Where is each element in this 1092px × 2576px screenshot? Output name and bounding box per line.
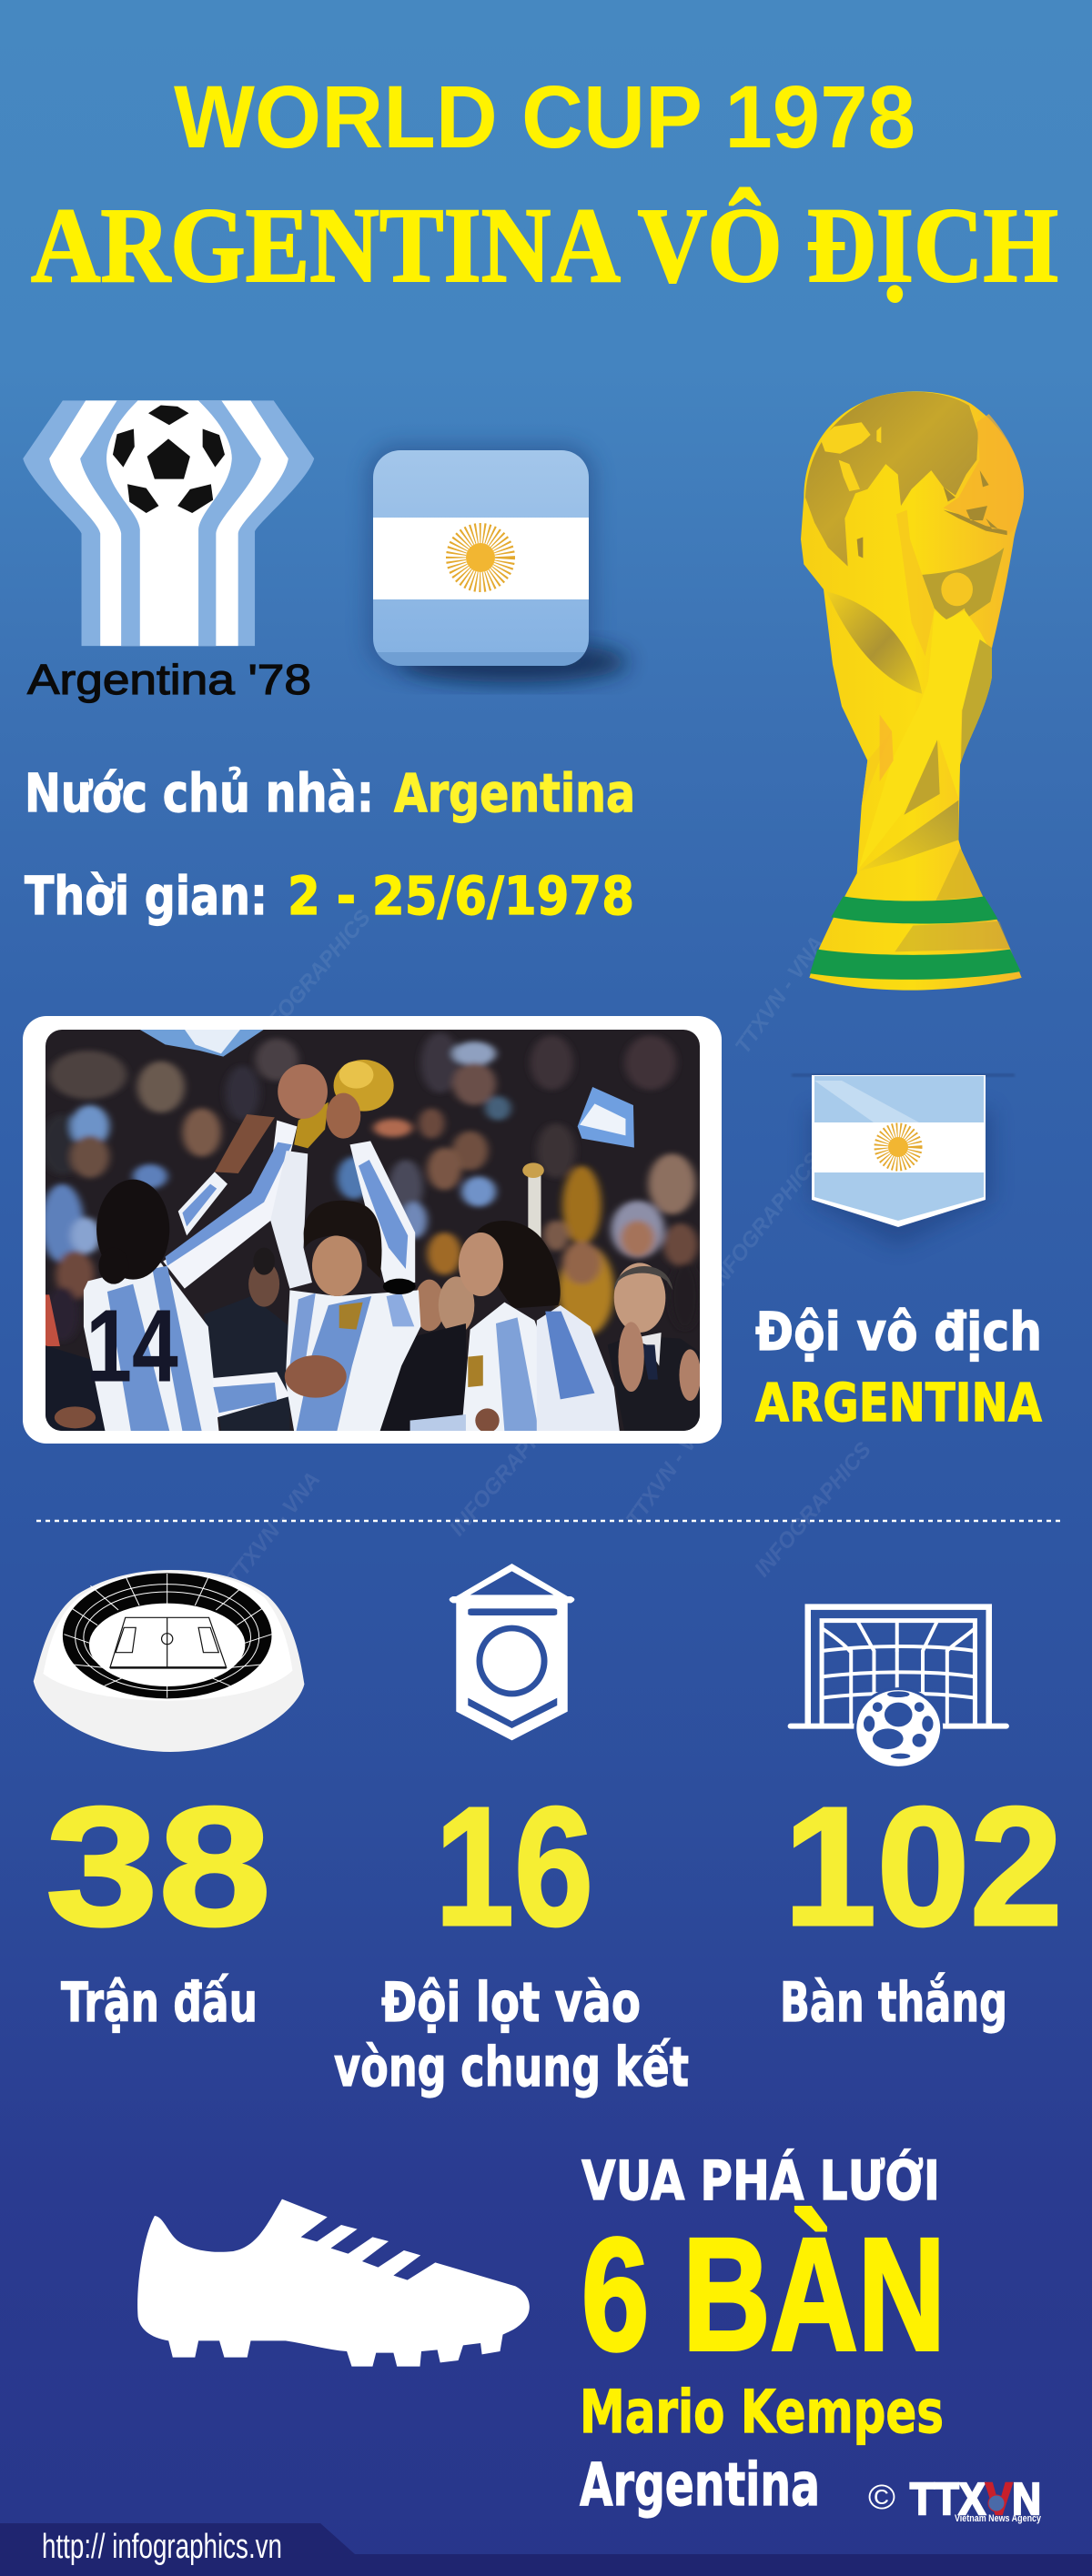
- title: [31, 67, 1058, 305]
- champion label: Đội vô địch: [755, 1301, 1042, 1363]
- copyright and agency logo: TTXVN: [910, 2475, 1041, 2524]
- copyright and agency logo: Vietnam News Agency: [955, 2513, 1042, 2524]
- scorer country: Argentina: [580, 2451, 820, 2520]
- copyright and agency logo: ©: [868, 2479, 895, 2517]
- trophy green bands: [831, 896, 998, 924]
- stat: matches: [46, 1773, 271, 2035]
- background arm: [215, 1114, 275, 1173]
- stat: teams: 16: [435, 1773, 593, 1961]
- watermarks: TTXVN - VNA: [731, 932, 829, 1058]
- crowd flags: [139, 1030, 264, 1057]
- red flag sliver: [46, 1294, 60, 1346]
- stat: goals: Bàn thắng: [780, 1971, 1007, 2035]
- top scorer text: [580, 2148, 945, 2520]
- stat: teams: vòng chung kết: [334, 2036, 689, 2099]
- lifted trophy: [294, 1102, 329, 1148]
- panel: team photo: [23, 1016, 722, 1444]
- scorer name: Mario Kempes: [580, 2379, 944, 2447]
- watermarks: INFOGRAPHICS: [750, 1438, 876, 1582]
- host country text: [25, 762, 635, 824]
- host country text: Argentina: [394, 762, 635, 824]
- stat: matches: Trận đấu: [61, 1971, 258, 2035]
- champion label: ARGENTINA: [755, 1372, 1042, 1434]
- stadium pitch: [110, 1617, 227, 1667]
- dates text: 2 - 25/6/1978: [288, 865, 634, 927]
- watermarks: [221, 906, 876, 1591]
- player right: [474, 1221, 561, 1308]
- footer url: http:// infographics.vn: [42, 2528, 282, 2566]
- watermarks: INFOGRAPHICS: [703, 1148, 826, 1295]
- stat: teams: Đội lọt vào: [381, 1971, 641, 2035]
- watermarks: TTXVN - VNA: [221, 1467, 325, 1591]
- photo: players lifting trophy: 14: [86, 1288, 178, 1404]
- player 14: [84, 1263, 219, 1431]
- icon: pennant: [450, 1564, 574, 1740]
- icon: football boot: [137, 2199, 530, 2367]
- icon: stadium: [34, 1570, 304, 1752]
- dates text: Thời gian:: [25, 865, 268, 927]
- player far right: [537, 1305, 620, 1431]
- stat: matches: 38: [46, 1773, 271, 1961]
- icon: pennant flag: [792, 1073, 1015, 1246]
- goals count: 6 BÀN: [581, 2206, 945, 2384]
- logo caption: Argentina '78: [27, 656, 311, 703]
- captain arms: [270, 1151, 312, 1289]
- stat: teams: [334, 1773, 689, 2099]
- host country text: Nước chủ nhà:: [25, 762, 374, 824]
- crowd: [41, 1032, 700, 1342]
- icon: goal and ball: [791, 1607, 1006, 1767]
- trophy shaded leaf: [826, 591, 922, 694]
- icon: flag button: [368, 445, 628, 682]
- champion label: [755, 1301, 1042, 1434]
- dark suits: [204, 1296, 289, 1431]
- logo: Argentina 78: [23, 400, 314, 703]
- photo frame: [23, 1016, 722, 1444]
- pennant sun: [882, 1131, 915, 1163]
- hand on chest: [212, 1372, 289, 1417]
- stat: goals: 102: [784, 1773, 1063, 1961]
- title line 1: WORLD CUP 1978: [174, 67, 915, 166]
- watermarks: INFOGRAPHICS: [249, 906, 376, 1050]
- footer band: [0, 2523, 1092, 2576]
- top scorer heading: VUA PHÁ LƯỚI: [581, 2148, 940, 2213]
- photo: players lifting trophy: [41, 1028, 704, 1433]
- watermarks: TTXVN - VNA: [622, 1405, 720, 1531]
- man in suit: [608, 1335, 702, 1433]
- watermarks: INFOGRAPHICS: [445, 1397, 571, 1541]
- trophy figure head: [941, 573, 973, 606]
- captain head: [312, 1235, 362, 1296]
- icon: sun of May: [456, 533, 505, 582]
- logo emblem: [23, 400, 314, 646]
- icon: World Cup trophy: [801, 391, 1024, 991]
- captain shirt: [286, 1290, 420, 1431]
- dates text: [25, 865, 634, 927]
